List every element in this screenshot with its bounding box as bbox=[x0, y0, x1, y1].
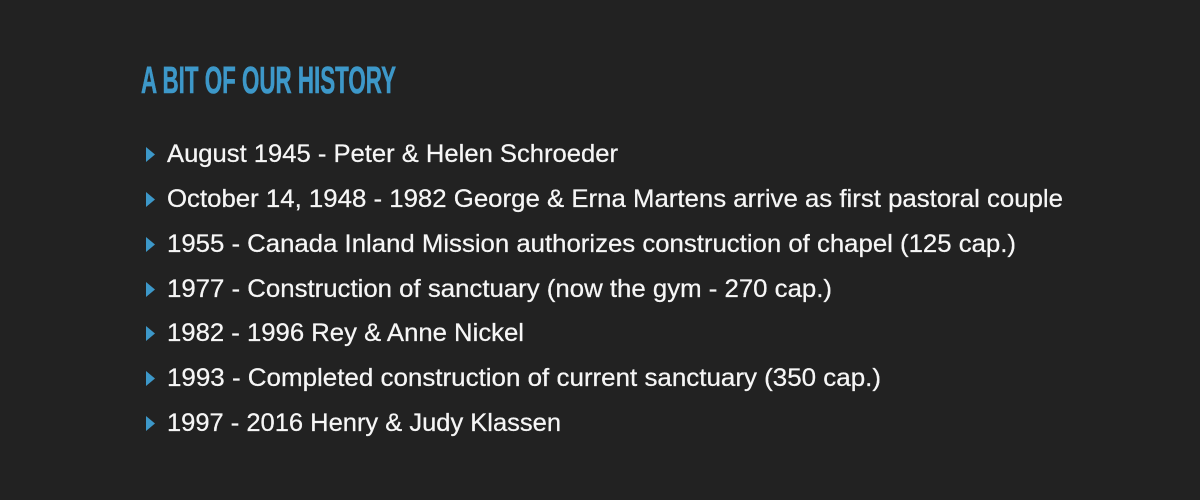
list item: 1977: 1977 - Construction of sanctuary (now the gym - 270 cap.) bbox=[167, 275, 832, 303]
list item: 1982: 1982 - 1996 Rey & Anne Nickel bbox=[167, 319, 524, 347]
list item: 1955: 1955 - Canada Inland Mission authorizes construction of chapel (125 cap.) bbox=[167, 230, 1016, 258]
title: A BIT OF OUR HISTORY bbox=[141, 60, 396, 102]
list item: 1997: 1997 - 2016 Henry & Judy Klassen bbox=[167, 409, 561, 437]
list item: August 1945: August 1945 - Peter & Helen Schroeder bbox=[167, 140, 618, 168]
list item: 1993: 1993 - Completed construction of current sanctuary (350 cap.) bbox=[167, 364, 881, 392]
list item: October 14, 1948: October 14, 1948 - 1982 George & Erna Martens arrive as first pastoral couple bbox=[167, 185, 1063, 213]
